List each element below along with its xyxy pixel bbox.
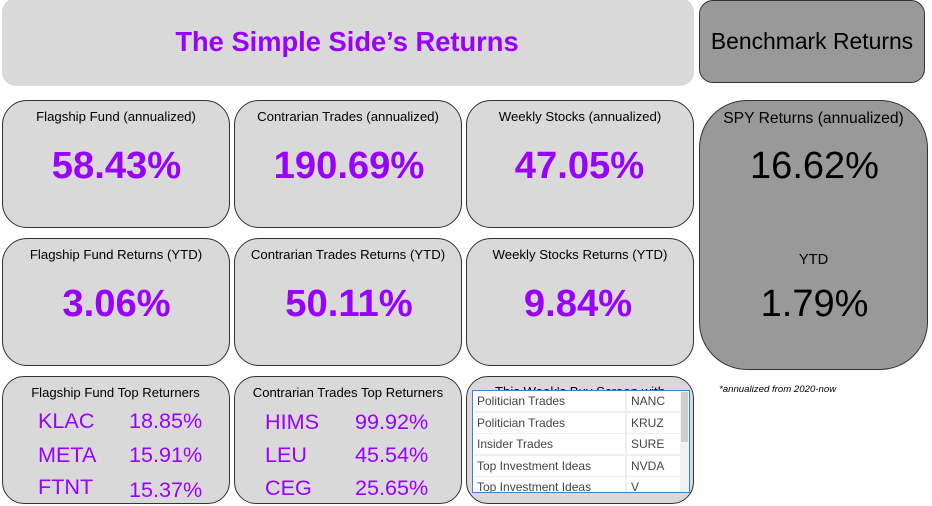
table <box>472 390 690 493</box>
title: The Simple Side’s Returns <box>175 26 519 57</box>
label: Weekly Stocks (annualized) <box>499 109 661 124</box>
row: Top Investment Ideas NVDA: NVDA <box>631 459 664 473</box>
value: 9.84% <box>524 282 632 325</box>
label: Flagship Fund Returns (YTD) <box>30 247 202 262</box>
value: 3.06% <box>62 282 171 325</box>
label: Flagship Fund (annualized) <box>36 109 196 124</box>
value: 190.69% <box>274 144 424 187</box>
value: KLAC: 18.85% <box>129 408 202 433</box>
clipped heading: This Week's Buy Screen with <box>495 384 665 399</box>
row: Top Investment Ideas V <box>474 477 680 499</box>
row: HIMS: HIMS <box>265 409 319 434</box>
panel: Contrarian Trades Top Returners <box>234 376 462 504</box>
row: Politician Trades NANC: Politician Trades <box>477 394 565 408</box>
SPY YTD value: 1.79% <box>761 283 868 325</box>
row: Politician Trades KRUZ <box>474 413 680 435</box>
value: LEU: 45.54% <box>355 442 428 467</box>
panel: Flagship Fund annualized <box>2 100 230 228</box>
header panel: Benchmark Returns <box>699 0 925 83</box>
header panel: The Simple Side's Returns <box>2 0 694 86</box>
row: KLAC: KLAC <box>38 408 94 433</box>
row: Top Investment Ideas NVDA: Top Investment Ideas <box>477 459 591 473</box>
value: 47.05% <box>515 144 644 187</box>
row: FTNT: FTNT <box>38 474 93 499</box>
row: Politician Trades NANC: NANC <box>631 394 665 408</box>
value: FTNT: 15.37% <box>129 477 202 502</box>
label: Contrarian Trades Returns (YTD) <box>251 247 445 262</box>
SPY label: SPY Returns (annualized) <box>723 110 904 127</box>
YTD label: YTD <box>799 252 828 268</box>
row: Politician Trades NANC <box>474 391 680 413</box>
row: Insider Trades SURE: Insider Trades <box>477 437 553 451</box>
scrollbar <box>680 391 689 492</box>
value: 58.43% <box>52 144 181 187</box>
panel: this week's buy screen <box>466 376 694 504</box>
panel: SPY returns <box>699 100 928 370</box>
label: Flagship Fund Top Returners <box>31 385 200 400</box>
row: Politician Trades KRUZ: KRUZ <box>631 416 664 430</box>
panel: Weekly Stocks YTD <box>466 238 694 366</box>
row: Insider Trades SURE: SURE <box>631 437 664 451</box>
value: META: 15.91% <box>129 442 202 467</box>
row: META: META <box>38 442 96 467</box>
row: Insider Trades SURE <box>474 434 680 456</box>
row: LEU: LEU <box>265 442 307 467</box>
value: 50.11% <box>285 282 413 325</box>
label: Contrarian Trades Top Returners <box>253 385 443 400</box>
panel: Weekly Stocks annualized <box>466 100 694 228</box>
panel: Contrarian Trades YTD <box>234 238 462 366</box>
value: HIMS: 99.92% <box>355 409 428 434</box>
footnote: *annualized from 2020-now <box>719 384 836 395</box>
benchmark heading: Benchmark Returns <box>711 28 913 54</box>
column divider <box>625 391 627 492</box>
panel: Flagship Fund YTD <box>2 238 230 366</box>
row: CEG: CEG <box>265 475 312 500</box>
label: Contrarian Trades (annualized) <box>257 109 439 124</box>
row: Politician Trades KRUZ: Politician Trades <box>477 416 565 430</box>
panel: Flagship Fund Top Returners <box>2 376 230 504</box>
value: CEG: 25.65% <box>355 475 428 500</box>
panel: Contrarian Trades annualized <box>234 100 462 228</box>
label: Weekly Stocks Returns (YTD) <box>493 247 667 262</box>
row: Top Investment Ideas NVDA <box>474 456 680 478</box>
SPY annualized value: 16.62% <box>750 145 879 187</box>
